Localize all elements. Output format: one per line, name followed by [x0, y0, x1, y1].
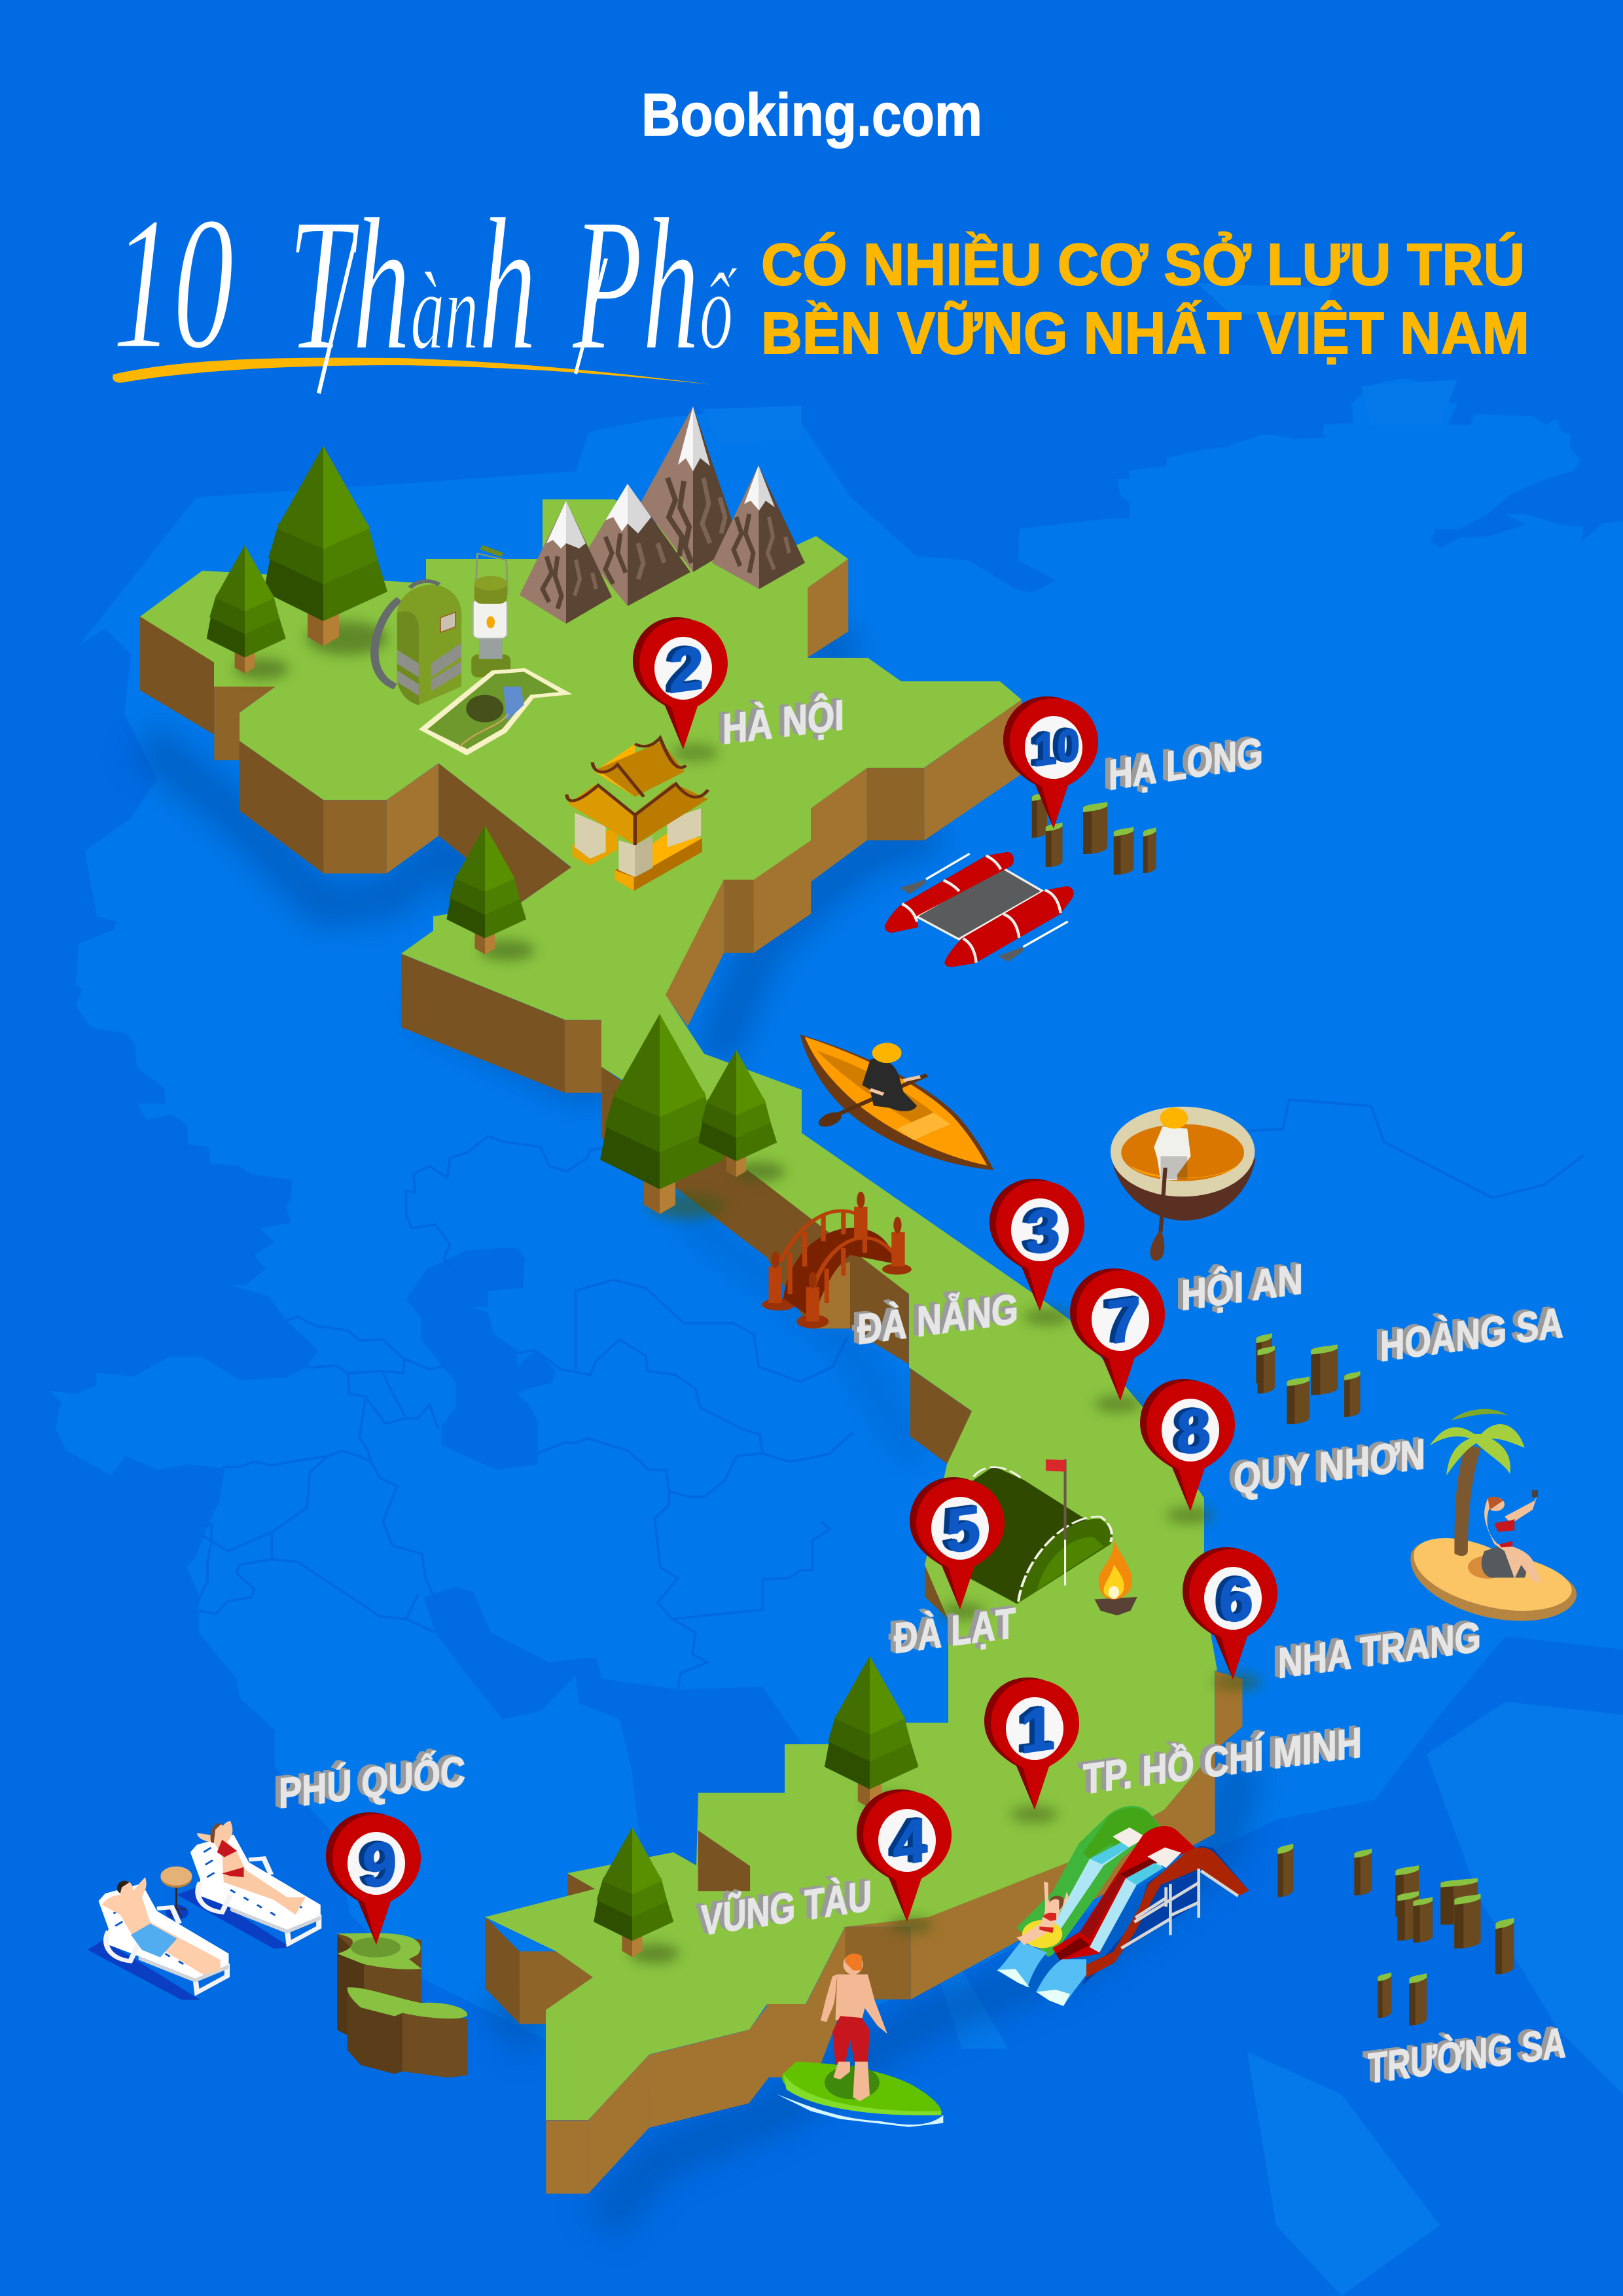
pin 6 [1183, 1547, 1277, 1679]
tree [825, 1656, 918, 1808]
cliff rocks: Hoàng Sa [1256, 1333, 1361, 1424]
cliff rocks: Hạ Long [1032, 792, 1156, 875]
icon: mountains [520, 406, 805, 624]
label: Hà Nội: HÀ NỘI [722, 691, 844, 753]
pin 4 [857, 1789, 952, 1922]
tree [207, 545, 286, 673]
tree [698, 1050, 777, 1177]
icon: backpack [374, 581, 461, 705]
label: Hội An: HỘI AN [1181, 1255, 1303, 1319]
pin 5 [910, 1477, 1005, 1609]
label: Nha Trang: NHA TRANG [1278, 1613, 1481, 1687]
north cliff faces [140, 559, 1022, 1093]
man [102, 1877, 221, 1975]
woman [197, 1821, 306, 1915]
icon: water slides [997, 1806, 1249, 2006]
south cliff faces [485, 1671, 1242, 2194]
label: Đà Lạt: ĐÀ LẠT [894, 1599, 1016, 1662]
icon: campfire [1094, 1539, 1137, 1615]
pin 3 [990, 1179, 1084, 1311]
icon: inflatable raft [885, 852, 1074, 967]
logo: Booking.com: Booking.com [641, 82, 982, 149]
cliff rocks: Trường Sa [1277, 1844, 1514, 2026]
title: script heading with underline: 10 [113, 178, 234, 388]
tree [264, 446, 387, 646]
pin 7: 7 [1107, 1284, 1141, 1358]
label: Vũng Tàu: VŨNG TÀU [701, 1872, 872, 1945]
coastal drop shadow in water [144, 628, 1243, 2225]
pin 6: 6 [1219, 1563, 1253, 1637]
lounger shadows [88, 1887, 291, 2000]
icon: tent with flag [963, 1460, 1113, 1604]
icon: folded map [419, 668, 573, 755]
upper light islands are painted below [0, 916, 319, 1767]
pin 9: 9 [363, 1828, 397, 1902]
pin 4: 4 [893, 1805, 928, 1879]
icon: lantern [471, 545, 510, 677]
label: TP. Hồ Chí Minh: TP. HỒ CHÍ MINH [1083, 1718, 1362, 1803]
tree [594, 1827, 673, 1957]
pin 1: 1 [1021, 1693, 1055, 1767]
woman's lounger [190, 1835, 321, 1944]
background: province outlines [198, 1136, 853, 1689]
pin 3: 3 [1026, 1194, 1060, 1268]
pin 2: 2 [669, 633, 704, 707]
pin 9 [326, 1812, 421, 1945]
pin 5: 5 [946, 1493, 980, 1567]
pin 8 [1140, 1379, 1235, 1511]
label: Hoàng Sa: HOÀNG SA [1380, 1299, 1563, 1371]
icon: pagoda [567, 738, 708, 891]
pin 10: 10 [1034, 718, 1080, 776]
pin shadows on central coast [889, 1308, 1260, 1934]
title: script heading with underline: Phố [571, 179, 738, 389]
label: Phú Quốc: PHÚ QUỐC [279, 1747, 465, 1818]
pin shadow: Hà Nội [671, 744, 719, 762]
icon: rowing boat [800, 1035, 993, 1170]
label: Hạ Long: HẠ LONG [1109, 728, 1263, 799]
pin 10 [1003, 696, 1098, 829]
pin 1 [984, 1677, 1079, 1810]
southern notch cliff [698, 1831, 750, 1891]
heading: line two: BỀN VỮNG NHẤT VIỆT NAM [761, 300, 1529, 367]
central cliff faces [601, 1067, 972, 1621]
icon: coracle with boatman [1111, 1107, 1255, 1261]
pin 8: 8 [1177, 1395, 1211, 1469]
pin 7 [1070, 1268, 1165, 1401]
pin 2 [633, 617, 728, 749]
icon: surfer on green board [777, 1954, 943, 2127]
table [160, 1867, 192, 1917]
tree [600, 1014, 724, 1214]
title: script heading with underline [113, 178, 738, 394]
tree [446, 825, 526, 954]
icon: Phú Quốc island rocks [337, 1933, 467, 2077]
tree shadows [234, 621, 916, 1964]
map: green land surface [140, 499, 1217, 2120]
label: Trường Sa: TRƯỜNG SA [1368, 2018, 1566, 2092]
heading: line one: CÓ NHIỀU CƠ SỞ LƯU TRÚ [761, 231, 1525, 298]
map: land sides [140, 559, 1242, 2194]
man's lounger [99, 1884, 228, 1992]
title: script heading with underline: Thành [288, 179, 537, 389]
label: Quy Nhơn: QUY NHƠN [1234, 1430, 1425, 1503]
label: Đà Nẵng: ĐÀ NẴNG [857, 1285, 1018, 1354]
icon: sun loungers with sunbathers [88, 1821, 321, 2000]
icon: Japanese bridge [762, 1192, 912, 1329]
icon: sand island with palm and woman [1410, 1409, 1577, 1621]
